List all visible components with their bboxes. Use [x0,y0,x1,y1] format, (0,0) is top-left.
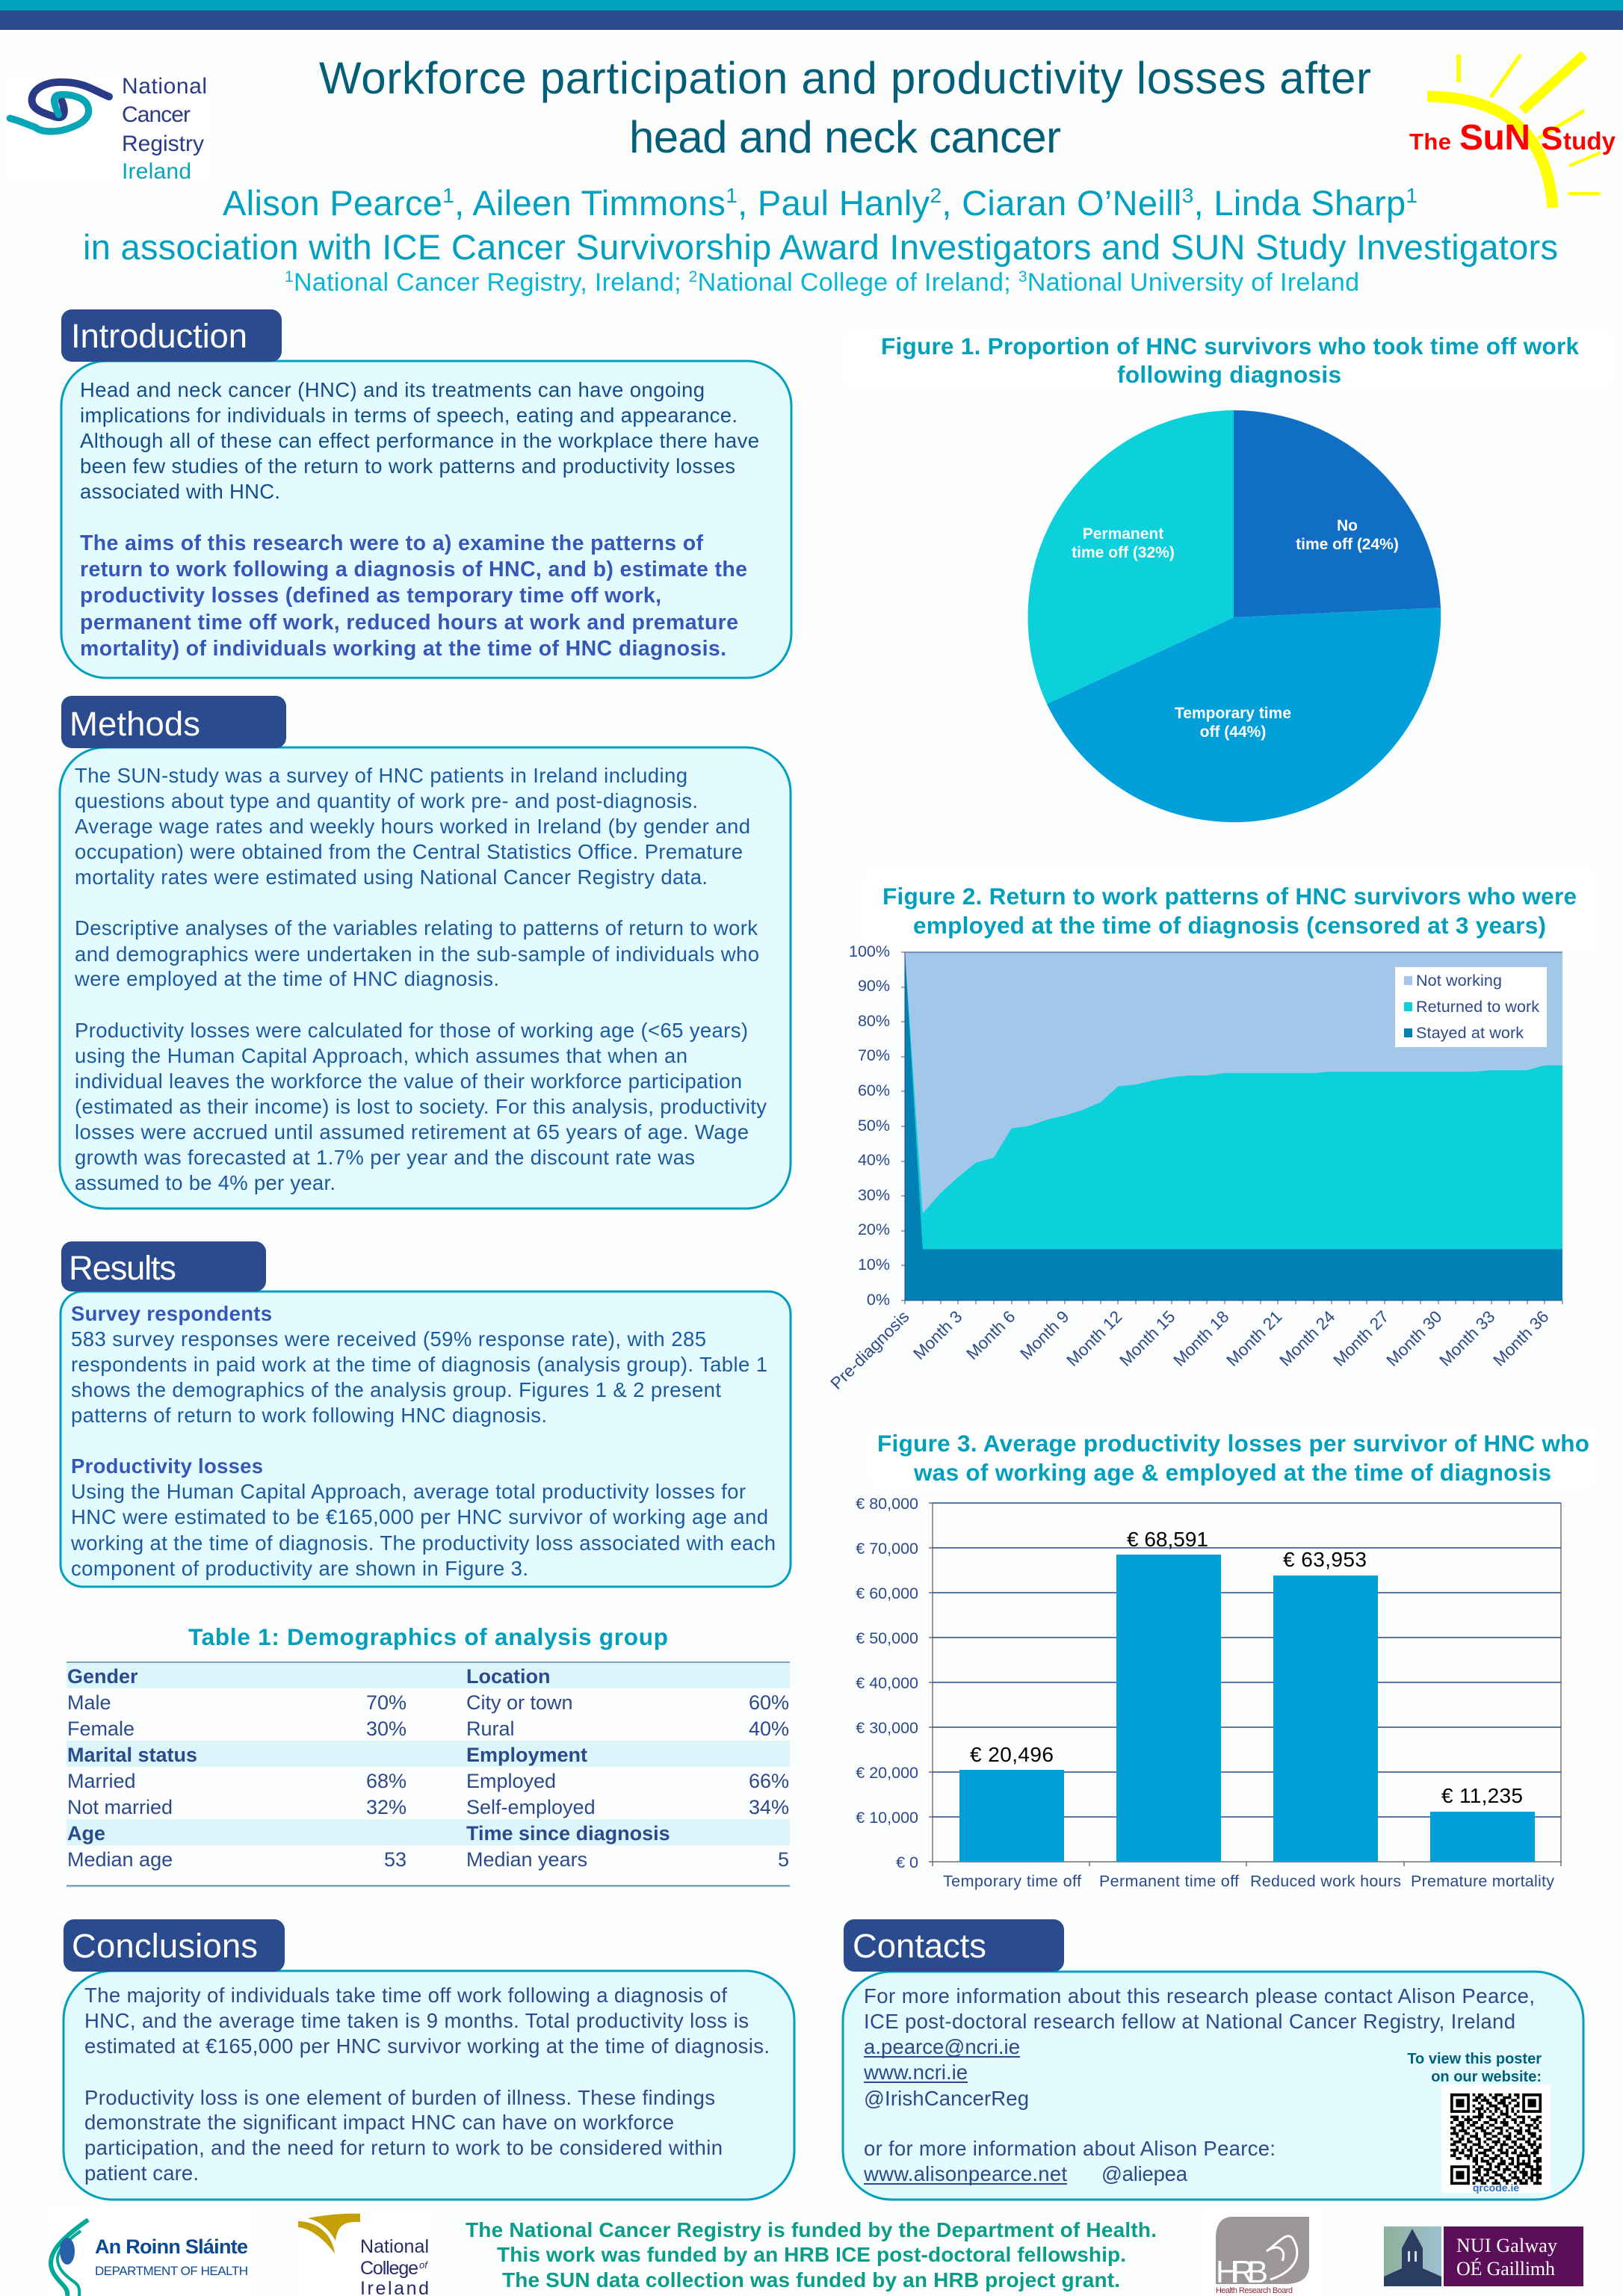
callout: view poster: on our website: [1431,2069,1542,2085]
logo: Health Research Board [1204,2208,1322,2296]
bar: reduced work hours: Reduced work hours [1250,1872,1401,1890]
authors [83,183,1558,267]
table right column [466,1665,789,1871]
y axis labels: 100% [849,942,890,960]
authors: 1 [726,184,738,207]
table right column: Time since diagnosis [466,1822,670,1845]
heading: Conclusions [64,1919,285,1972]
authors: , Aileen Timmons [454,183,726,223]
table right column: Self-employed [466,1796,596,1818]
logo: Health Research Board: HRB [1216,2254,1268,2289]
table left column: Median age [67,1848,173,1871]
table right column: Location [466,1665,550,1688]
table left column: 32% [366,1796,406,1818]
bar: premature mortality: € 11,235 [1441,1784,1523,1807]
y axis labels: 0% [867,1291,890,1309]
figure 2: area chart [827,867,1598,1393]
x axis labels [827,1307,1553,1393]
y axis labels: € 10,000 [856,1809,918,1827]
bar: reduced work hours [1250,1548,1401,1890]
pie slice: no time off: No [1337,517,1358,534]
table right column: 34% [749,1796,789,1818]
y axis labels: 30% [858,1186,890,1204]
legend [1395,967,1547,1047]
y axis labels [849,942,890,1309]
funding statement: The SUN data collection was funded by an HRB project grant. [502,2268,1120,2292]
figure 3 title [869,1426,1598,1488]
y axis labels: 20% [858,1220,890,1238]
text: methods body: mortality rates were estimated using National Cancer Registry data. [75,865,708,889]
x axis labels: Month 12 [1063,1307,1126,1370]
bar: premature mortality: Premature mortality [1411,1872,1554,1890]
logo: The SUN Study: The [1409,129,1451,155]
x axis labels: Month 33 [1436,1307,1499,1370]
affiliations: 1 [285,268,294,286]
bar: permanent time off: € 68,591 [1127,1528,1208,1551]
text: aims: productivity losses (defined as temporary time off work, [80,584,661,608]
icon: swoosh [51,2220,88,2296]
table left column: Age [67,1822,105,1845]
text: conclusions body: The majority of individuals take time off work following a diagnosis of [84,1984,727,2007]
figure 1 title: following diagnosis [1117,361,1341,388]
pie slice: temporary time off [1047,608,1441,822]
text: survey respondents: shows the demographics of the analysis group. Figures 1 & 2 present [71,1378,721,1401]
text: methods body: growth was forecasted at 1.7% per year and the discount rate was [75,1146,695,1169]
text: methods body [74,764,767,1194]
heading: Conclusions: Conclusions [72,1927,258,1965]
table right column: Median years [466,1848,587,1871]
text: conclusions body: demonstrate the significant impact HNC can have on workforce [84,2111,674,2134]
affiliations: National Cancer Registry, Ireland; [294,268,688,297]
heading: Methods [61,696,286,748]
text: survey respondents: 583 survey responses were received (59% response rate), with 285 [71,1327,706,1351]
logo: National College of Ireland [298,2214,433,2296]
figure 3: bar chart [856,1426,1598,1890]
figure 1: pie chart [842,330,1616,822]
text: background [80,378,759,503]
text: background: implications for individuals in terms of speech, eating and appearance. [80,404,738,427]
area plot [905,952,1562,1304]
y axis labels: 80% [858,1012,890,1030]
y axis labels: € 60,000 [856,1584,918,1602]
text: productivity losses: Using the Human Capital Approach, average total productivity losses for [71,1480,746,1503]
heading: Results [61,1241,266,1292]
text: survey respondents: respondents in paid work at the time of diagnosis (analysis group). Table 1 [71,1353,767,1376]
table: demographics [67,1623,790,1886]
logo wordmark: Registry [122,132,204,156]
logo: Department of Health [46,2205,252,2296]
title: head and neck cancer [629,112,1061,162]
logo wordmark: National [122,74,207,99]
y axis labels: 70% [858,1046,890,1064]
logo: Department of Health: An Roinn Sláinte [95,2235,248,2258]
text: productivity losses: HNC were estimated to be €165,000 per HNC survivor of working age and [71,1505,768,1528]
authors: 1 [1406,184,1418,207]
text: contact details: @IrishCancerReg [864,2087,1029,2110]
figure 1 title: Figure 1. Proportion of HNC survivors who took time off work [881,333,1579,359]
text: background: Although all of these can effect performance in the workplace there have [80,429,759,452]
funding statement: The National Cancer Registry is funded by the Department of Health. [466,2218,1157,2241]
table right column: Employment [466,1744,587,1766]
logo: The SUN Study [1409,55,1616,208]
y axis labels: € 0 [896,1854,918,1871]
logo: NUI Galway: OÉ Gaillimh [1456,2258,1555,2280]
y axis labels: € 70,000 [856,1540,918,1558]
panel: conclusions [64,1919,794,2200]
text: methods body: Descriptive analyses of the variables relating to patterns of return to work [75,916,758,939]
heading: Contacts: Contacts [853,1927,986,1965]
bar: permanent time off: Permanent time off [1099,1872,1239,1890]
x axis labels: Pre-diagnosis [827,1307,913,1393]
text: contact details: For more information about this research please contact Alison Pearce, [864,1984,1535,2008]
table left column: Gender [67,1665,138,1688]
figure 2 title: employed at the time of diagnosis (censored at 3 years) [913,912,1546,939]
authors: , Ciaran O’Neill [942,183,1181,223]
table left column: 30% [366,1718,406,1740]
heading: Methods: Methods [69,705,200,743]
logo wordmark: Cancer [122,102,191,127]
icon: swirl [10,82,109,132]
figure 1 title [842,330,1616,388]
gridlines and axes [929,1503,1561,1866]
affiliations: 2 [689,268,697,286]
logo: The SUN Study: SuN [1459,118,1530,158]
text: background: associated with HNC. [80,480,280,503]
text: background: been few studies of the return to work patterns and productivity losses [80,454,735,478]
funding statement [466,2218,1157,2292]
text: productivity losses: working at the time of diagnosis. The productivity loss associated with each [70,1531,776,1555]
panel: contacts [843,1919,1583,2200]
table right column: Rural [466,1718,515,1740]
text: aims: return to work following a diagnosis of HNC, and b) estimate the [80,558,747,581]
bar: reduced work hours: € 63,953 [1283,1548,1367,1571]
authors: , Linda Sharp [1194,183,1406,223]
figure 3 title: was of working age & employed at the time of diagnosis [913,1459,1551,1486]
logo: National College of Ireland: College [360,2258,418,2279]
table right column: City or town [466,1691,573,1714]
logo: NUI Galway [1384,2226,1583,2286]
legend: Not working [1416,972,1502,990]
y axis labels: € 80,000 [856,1495,918,1513]
text: contact details [863,1984,1535,2185]
logo: Department of Health: DEPARTMENT OF HEALTH [95,2264,248,2278]
text: contact details: or for more information about Alison Pearce: [864,2137,1276,2160]
text: conclusions body: Productivity loss is one element of burden of illness. These findings [84,2086,715,2109]
legend: Stayed at work [1416,1024,1524,1042]
callout: view poster: To view this poster [1407,2051,1542,2067]
text: methods body: losses were accrued until assumed retirement at 65 years of age. Wage [75,1120,749,1144]
text: contact details: www.alisonpearce.net [863,2162,1067,2185]
title: Workforce participation and productivity losses after [319,53,1371,103]
x axis labels: Month 36 [1490,1307,1553,1370]
text: aims [80,531,747,661]
logo: National College of Ireland: National [360,2236,429,2257]
y axis labels: 10% [858,1256,890,1274]
table left column: Married [67,1770,136,1792]
table right column: Employed [466,1770,556,1792]
text: methods body: Productivity losses were calculated for those of working age (<65 years) [75,1019,748,1042]
text: survey respondents: patterns of return to work following HNC diagnosis. [71,1404,547,1427]
pie slice: temporary time off: Temporary time [1175,705,1291,722]
text: methods body: were employed at the time of HNC diagnosis. [74,967,499,990]
table left column: Female [67,1718,135,1740]
x axis labels: Month 24 [1276,1307,1339,1370]
bar: temporary time off: € 20,496 [970,1743,1054,1766]
y axis labels: € 40,000 [856,1674,918,1692]
bar: permanent time off [1099,1528,1239,1890]
text: conclusions body: estimated at €165,000 per HNC survivor working at the time of diagnosis. [84,2034,770,2058]
text: methods body: and demographics were undertaken in the sub-sample of individuals who [75,942,759,966]
text: contact details: a.pearce@ncri.ie [864,2035,1020,2058]
y axis labels: € 30,000 [856,1719,918,1737]
panel: introduction [61,309,791,678]
text: productivity losses: component of productivity are shown in Figure 3. [71,1557,528,1580]
figure 2 title: Figure 2. Return to work patterns of HNC survivors who were [882,883,1577,910]
pie slice: permanent time off [1028,410,1234,704]
x axis labels: Month 6 [962,1307,1019,1363]
text: conclusions body: HNC, and the average time taken is 9 months. Total productivity loss is [84,2009,749,2032]
title [319,53,1371,162]
text: productivity losses [70,1454,776,1580]
table left column: 70% [366,1691,406,1714]
text: contact details: @aliepea [1101,2162,1188,2185]
table right column: 5 [778,1848,789,1871]
text: aims: The aims of this research were to a) examine the patterns of [80,531,704,555]
logo: National College of Ireland: of [419,2259,428,2271]
logo wordmark: Ireland [122,159,191,184]
y axis labels: 40% [858,1151,890,1169]
text: methods body: using the Human Capital Approach, which assumes that when an [75,1044,687,1067]
table right column: 60% [749,1691,789,1714]
table title: Table 1: Demographics of analysis group [188,1623,668,1650]
heading: Introduction: Introduction [71,317,247,355]
heading: Results: Results [69,1249,176,1287]
text: methods body: Average wage rates and weekly hours worked in Ireland (by gender and [75,815,750,838]
text: contact details: www.ncri.ie [863,2061,968,2084]
table left column: Marital status [67,1744,197,1766]
bar: premature mortality [1411,1784,1554,1890]
authors: in association with ICE Cancer Survivorship Award Investigators and SUN Study Investigators [83,227,1558,267]
panel: results [61,1241,791,1587]
logo wordmark [122,74,207,184]
x axis labels: Month 30 [1383,1307,1446,1370]
x axis labels: Month 15 [1116,1307,1179,1370]
text: aims: permanent time off work, reduced hours at work and premature [80,611,738,635]
text: survey respondents: Survey respondents [71,1302,272,1325]
text: conclusions body: patient care. [84,2161,199,2185]
authors: 2 [930,184,942,207]
text: methods body: questions about type and quantity of work pre- and post-diagnosis. [75,789,698,812]
authors: Alison Pearce [223,183,442,223]
text: survey respondents [71,1302,767,1427]
pie slice: no time off [1234,410,1441,617]
y axis labels: € 20,000 [856,1764,918,1782]
bar: temporary time off [943,1743,1081,1890]
logo: NUI Galway: NUI Galway [1456,2235,1557,2256]
text: methods body: occupation) were obtained from the Central Statistics Office. Premature [75,840,743,863]
authors: 3 [1182,184,1193,207]
table left column: 53 [384,1848,406,1871]
table left column [67,1665,406,1871]
logo: National Cancer Registry Ireland [7,74,207,184]
figure 3 title: Figure 3. Average productivity losses per survivor of HNC who [877,1430,1589,1457]
heading: Contacts [844,1919,1064,1972]
table left column: Not married [67,1796,173,1818]
logo: The SUN Study: S [1541,120,1562,157]
pie slice: permanent time off: Permanent [1083,525,1163,543]
table right column: 40% [749,1718,789,1740]
table left column: Male [67,1691,111,1714]
affiliations: National College of Ireland; [698,268,1018,297]
table right column: 66% [749,1770,789,1792]
pie slice: temporary time off: off (44%) [1200,723,1266,741]
text: aims: mortality) of individuals working at the time of HNC diagnosis. [80,637,726,661]
text: contact details: ICE post-doctoral research fellow at National Cancer Registry, Ireland [864,2010,1515,2033]
funding statement: This work was funded by an HRB ICE post-doctoral fellowship. [497,2243,1126,2266]
text: productivity losses: Productivity losses [71,1454,263,1478]
QR code: qrcode.ie [1473,2182,1519,2194]
x axis labels: Month 9 [1016,1307,1073,1363]
y axis labels: € 50,000 [856,1629,918,1647]
pie slice: permanent time off: time off (32%) [1072,544,1175,561]
pie slice: no time off: time off (24%) [1296,536,1399,553]
callout: view poster [1407,2051,1542,2085]
x axis labels: Month 18 [1170,1307,1233,1370]
affiliations: 3 [1018,268,1027,286]
text: methods body: The SUN-study was a survey of HNC patients in Ireland including [75,764,687,787]
text: conclusions body [84,1984,770,2185]
figure 2 title [863,867,1598,953]
heading: Introduction [61,309,282,362]
affiliations: National University of Ireland [1027,268,1359,297]
table left column: 68% [366,1770,406,1792]
QR code [1441,2084,1551,2194]
logo: The SUN Study: tudy [1563,127,1616,155]
legend: Returned to work [1416,998,1539,1016]
x axis labels: Month 27 [1330,1307,1393,1370]
authors: , Paul Hanly [738,183,930,223]
panel: methods [60,696,791,1209]
logo: Health Research Board: Health Research Board [1216,2286,1293,2295]
x axis labels: Month 3 [909,1307,966,1363]
text: methods body: assumed to be 4% per year. [75,1171,336,1194]
bar: temporary time off: Temporary time off [943,1872,1081,1890]
text: methods body: (estimated as their income) is lost to society. For this analysis, productivity [75,1095,767,1118]
text: background: Head and neck cancer (HNC) and its treatments can have ongoing [80,378,705,401]
y axis labels: 90% [858,977,890,995]
text: conclusions body: participation, and the need for return to work to be considered within [84,2136,723,2159]
x axis labels: Month 21 [1223,1307,1286,1370]
y axis labels: 60% [858,1081,890,1099]
icon: gold swoosh [298,2214,360,2253]
y axis labels [856,1495,918,1871]
y axis labels: 50% [858,1117,890,1135]
authors: 1 [442,184,454,207]
text: methods body: individual leaves the workforce the value of their workforce participation [75,1070,742,1093]
